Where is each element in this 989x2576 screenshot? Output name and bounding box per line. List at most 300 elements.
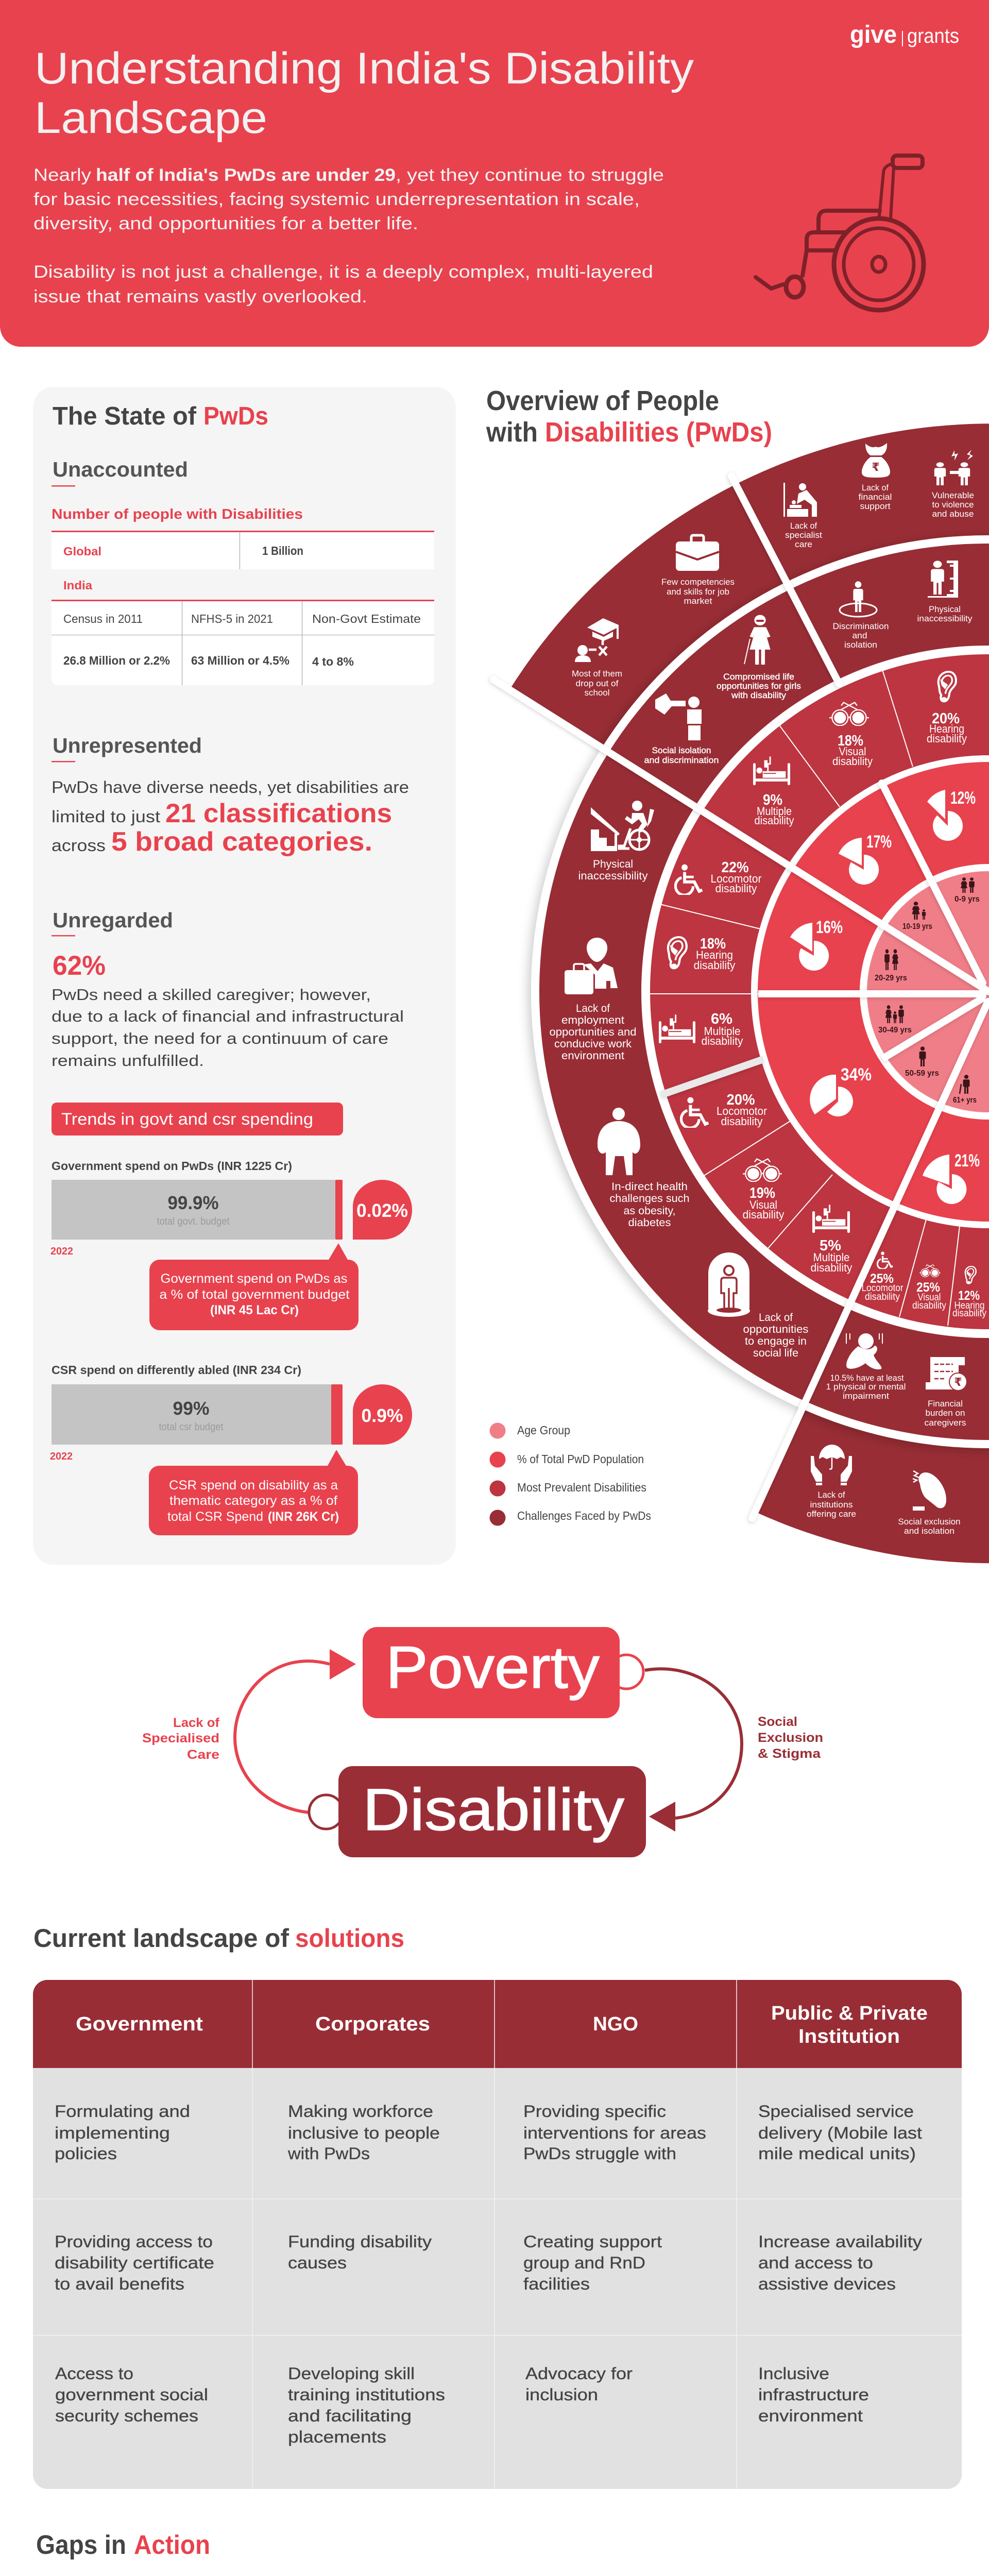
label: social exclusion and stigma: Social [758, 1715, 797, 1729]
box: disability: Disability [363, 1777, 625, 1843]
column: corporates: Developing skill [288, 2364, 415, 2383]
intro text [33, 165, 664, 307]
disability: 25% locomotor [861, 1251, 903, 1302]
challenge: physical or mental impairment: impairment [843, 1391, 889, 1401]
challenge: compromised life opportunities: opportunities for girls [717, 681, 801, 691]
table: number of people with disabilities: 63 Million or 4.5% [191, 654, 289, 667]
chart: radial wheel of PwDs [493, 423, 989, 1563]
challenge: lack of employment: environment [561, 1050, 624, 1062]
challenge: in-direct health: challenges such [610, 1193, 689, 1205]
disability: 9% multiple: 9% [763, 792, 782, 808]
disability: 6% multiple [659, 1011, 743, 1047]
age: 50-59 yrs [905, 1046, 939, 1078]
column: public and private institution: infrastructure [758, 2385, 869, 2404]
table header labels: Institution [798, 2026, 900, 2047]
challenge: financial burden: Financial [928, 1399, 963, 1409]
logo: give grants [850, 21, 959, 48]
disability: 12% hearing: Hearing [954, 1300, 985, 1311]
challenge: vulnerable to violence: and abuse [932, 509, 974, 519]
challenge: financial burden: caregivers [924, 1418, 966, 1428]
column: public and private institution: Specialised service [758, 2102, 914, 2121]
challenge: lack of employment [549, 938, 637, 1062]
challenge: lack of employment: conducive work [554, 1038, 632, 1050]
table: number of people with disabilities: 4 to 8% [312, 655, 354, 668]
challenge: compromised life opportunities: with disability [731, 690, 787, 700]
section: unregarded heading: Unregarded [53, 908, 173, 932]
logo: give grants: grants [907, 25, 959, 47]
heading: gaps in action: Gaps in [36, 2530, 126, 2560]
ring gap [860, 864, 989, 1120]
challenge: lack of specialist care: specialist [785, 530, 822, 540]
disability: 6% multiple: disability [702, 1035, 743, 1047]
challenge: few competencies: market [684, 596, 712, 606]
disability: 19% visual: Visual [749, 1198, 777, 1211]
disability: 9% multiple: disability [754, 814, 794, 827]
stat: 62%: 62% [53, 951, 106, 981]
disability: 5% multiple: disability [811, 1261, 852, 1274]
disability: 20% locomotor: disability [721, 1115, 762, 1128]
challenge: lack of institutions: Lack of [818, 1490, 845, 1500]
share: 34% [810, 1065, 872, 1116]
disability: 20% hearing: 20% [932, 710, 960, 727]
challenge: physical inaccessibility top [917, 561, 973, 623]
overview heading: with [486, 417, 538, 448]
column: corporates: training institutions [288, 2385, 445, 2404]
challenge: lack of specialist care [783, 483, 822, 549]
overview heading: Disabilities (PwDs) [545, 417, 772, 448]
disability: 18% hearing: Hearing [696, 948, 733, 961]
disability: 5% multiple: 5% [820, 1238, 841, 1254]
ring: prevalent disabilities [650, 654, 989, 1329]
intro text: , yet they continue to struggle [396, 165, 664, 185]
column: corporates: with PwDs [287, 2144, 370, 2163]
challenge: discrimination and isolation: Discrimination [832, 621, 889, 631]
challenge: social isolation [644, 693, 719, 765]
label: social exclusion and stigma: Exclusion [758, 1731, 823, 1745]
table: number of people with disabilities: India [63, 579, 92, 592]
column: government: policies [55, 2144, 117, 2163]
thin dividers [646, 668, 960, 1326]
column: government: implementing [55, 2124, 170, 2142]
challenge: social exclusion: and isolation [904, 1526, 954, 1536]
spokes [493, 476, 989, 1518]
disability: 25% locomotor: disability [865, 1292, 900, 1302]
age: 20-29 yrs: 20-29 yrs [875, 974, 907, 982]
ring gap [751, 755, 989, 1228]
challenge: discrimination and isolation: isolation [844, 640, 877, 650]
share: 16%: 16% [816, 918, 843, 937]
challenge: few competencies: and skills for job [667, 587, 729, 597]
age: 10-19 yrs [902, 902, 932, 931]
overview heading [486, 385, 772, 448]
banner background [0, 0, 989, 347]
age: 30-49 yrs [878, 1005, 912, 1035]
callout: CSR spend: (INR 26K Cr) [268, 1510, 339, 1524]
chart: CSR spend: 99% [173, 1398, 209, 1419]
heading: gaps in action [36, 2530, 210, 2560]
chart: government spend: total govt. budget [157, 1216, 230, 1227]
unrepresented text: 21 classifications [165, 799, 392, 828]
header banner [0, 0, 989, 347]
challenge: few competencies [661, 535, 735, 606]
column: public and private institution: delivery (Mobile last [758, 2124, 922, 2142]
heading: current landscape of solutions: Current landscape of [33, 1924, 289, 1953]
chart: government spend [50, 1159, 412, 1257]
table header labels: NGO [593, 2013, 638, 2035]
challenge: physical inaccessibility left: inaccessibility [578, 870, 648, 882]
icon: wheelchair [756, 156, 924, 310]
disability: 18% visual: Visual [839, 745, 866, 758]
heading: current landscape of solutions: solutions [295, 1924, 404, 1953]
unrepresented text: across [52, 836, 106, 855]
caregiver text: support, the need for a continuum of care [52, 1029, 388, 1047]
challenge: financial burden: burden on [925, 1408, 965, 1418]
caregiver text: remains unfulfilled. [52, 1052, 204, 1070]
challenge: lack of financial support: ₹ [872, 461, 880, 474]
disability: 20% hearing: Hearing [929, 722, 964, 735]
heading: gaps in action: Action [134, 2530, 210, 2560]
disability: 22% locomotor [675, 859, 761, 895]
table: number of people with disabilities: Census in 2011 [63, 612, 143, 625]
arrow: disability to poverty [235, 1649, 356, 1829]
section: unaccounted heading: Unaccounted [53, 457, 188, 481]
challenge: lack of financial support: support [860, 501, 891, 511]
challenge: in-direct health: as obesity, [623, 1205, 676, 1217]
column: NGO: Advocacy for [525, 2364, 633, 2383]
challenge: lack of opportunities: Lack of [759, 1312, 793, 1324]
disability: 6% multiple: Multiple [704, 1025, 741, 1038]
table: number of people with disabilities: Global [63, 545, 101, 558]
legend: Age Group [517, 1423, 570, 1437]
column: public and private institution: and access to [758, 2253, 873, 2272]
disability: 25% visual [912, 1265, 946, 1311]
column: public and private institution: mile medical units) [758, 2144, 916, 2163]
share: 21% [923, 1151, 980, 1204]
disability: 22% locomotor: Locomotor [711, 872, 761, 885]
challenge: lack of opportunities [708, 1252, 809, 1359]
challenge: compromised life opportunities: Compromised life [723, 672, 794, 682]
disability: 19% visual [743, 1159, 784, 1221]
challenge: social exclusion [898, 1471, 960, 1536]
chart: CSR spend: 0.9% [362, 1405, 403, 1426]
challenge: lack of employment: employment [561, 1014, 624, 1026]
column: corporates: inclusive to people [288, 2124, 440, 2142]
age: 0-9 yrs [954, 877, 980, 904]
challenge: lack of institutions: offering care [807, 1509, 856, 1519]
table header labels: Government [76, 2013, 203, 2035]
intro text: for basic necessities, facing systemic underrepresentation in scale, [33, 190, 640, 209]
disability: 25% visual: 25% [916, 1280, 940, 1295]
intro text: Disability is not just a challenge, it is a deeply complex, multi-layered [33, 262, 653, 282]
column: corporates: placements [288, 2428, 386, 2446]
share: 17% [839, 832, 892, 885]
challenge: lack of financial support [858, 443, 892, 511]
table header labels [76, 2003, 928, 2047]
callout: government budget: Government spend on PwDs as [161, 1272, 347, 1286]
heading: current landscape of solutions [33, 1924, 404, 1953]
legend: Challenges Faced by PwDs [517, 1509, 651, 1522]
callout: government budget: a % of total government budget [160, 1287, 350, 1302]
disability: 20% locomotor [681, 1092, 767, 1128]
disability: 20% locomotor: 20% [726, 1092, 755, 1108]
challenge: lack of specialist care: Lack of [790, 521, 817, 531]
chart: government spend: 99.9% [168, 1192, 218, 1213]
white ring with shadow [531, 535, 989, 1448]
ring: age group [867, 871, 989, 1112]
disability: 25% visual: Visual [918, 1292, 941, 1303]
disability: 22% locomotor: 22% [721, 859, 749, 876]
disability: 5% multiple: Multiple [813, 1251, 850, 1264]
table backgrounds [33, 1980, 962, 2489]
label: lack of specialised care: Specialised [142, 1731, 219, 1745]
challenge: social isolation: and discrimination [644, 755, 719, 765]
chart: CSR spend: total csr budget [159, 1421, 224, 1433]
challenge: lack of employment: opportunities and [549, 1026, 637, 1038]
overview heading: Overview of People [486, 385, 719, 416]
panel heading [53, 402, 268, 430]
table: solutions [33, 1980, 962, 2489]
challenge: few competencies: Few competencies [661, 577, 735, 587]
callout: CSR spend: thematic category as a % of [169, 1494, 337, 1508]
column: NGO [523, 2102, 706, 2404]
unrepresented text: 5 broad categories. [111, 827, 372, 857]
trends label [52, 1103, 343, 1136]
chart: CSR spend [50, 1363, 412, 1462]
intro text: diversity, and opportunities for a better life. [33, 214, 418, 233]
column: corporates: causes [288, 2253, 347, 2272]
panel heading: PwDs [203, 402, 268, 430]
main title: Landscape [35, 93, 267, 143]
challenge: lack of institutions [807, 1445, 856, 1519]
share: 21%: 21% [954, 1151, 980, 1171]
panel heading: The State of [53, 402, 197, 430]
disability: 20% hearing [927, 672, 967, 745]
section: unrepresented heading: Unrepresented [53, 734, 202, 757]
label: lack of specialised care [142, 1716, 220, 1762]
challenge: in-direct health: In-direct health [611, 1181, 688, 1193]
challenge: drop out of school: drop out of [576, 679, 619, 688]
column: corporates [287, 2102, 445, 2446]
label: lack of specialised care: Lack of [173, 1716, 220, 1730]
table: number of people with disabilities: 1 Billion [262, 544, 303, 557]
challenge: lack of opportunities: opportunities [743, 1324, 809, 1335]
arrow: poverty to disability [609, 1655, 742, 1832]
disability: 20% locomotor: Locomotor [717, 1105, 767, 1117]
caregiver text [52, 986, 404, 1070]
share: 12%: 12% [950, 788, 976, 808]
disability: 20% hearing: disability [927, 732, 967, 745]
challenge: compromised life opportunities [717, 615, 801, 700]
column: government: to avail benefits [55, 2275, 184, 2293]
age: 30-49 yrs: 30-49 yrs [878, 1026, 912, 1035]
challenge: physical inaccessibility top: inaccessibility [917, 614, 973, 623]
challenge: discrimination and isolation [832, 581, 889, 650]
callout: CSR spend: CSR spend on disability as a [169, 1478, 338, 1493]
ring: share of PwD population [758, 762, 989, 1222]
column: NGO: facilities [523, 2275, 590, 2293]
chart: government spend: Government spend on PwDs (INR 1225 Cr) [52, 1159, 292, 1173]
box: poverty: Poverty [386, 1635, 600, 1701]
share: 34%: 34% [841, 1065, 872, 1084]
age: 50-59 yrs: 50-59 yrs [905, 1069, 939, 1078]
callout: government budget [149, 1243, 359, 1330]
intro text: Nearly [33, 165, 91, 185]
challenge: lack of opportunities: to engage in [745, 1335, 807, 1347]
main title [35, 44, 694, 143]
callout: CSR spend: total CSR Spend [167, 1510, 263, 1524]
ring gap [641, 646, 989, 1338]
table: number of people with disabilities: Non-Govt Estimate [312, 612, 421, 625]
disability: 6% multiple: 6% [711, 1011, 732, 1027]
challenge: lack of opportunities: social life [753, 1347, 798, 1359]
panel background [33, 387, 456, 1565]
challenge: physical or mental impairment [826, 1333, 906, 1401]
column: government: security schemes [55, 2406, 198, 2425]
age: 20-29 yrs [875, 949, 907, 982]
column: NGO: inclusion [525, 2385, 598, 2404]
logo: give grants: give [850, 21, 897, 48]
disability: 25% locomotor: Locomotor [861, 1283, 903, 1294]
table title: Number of people with Disabilities [52, 506, 303, 522]
disability: 9% multiple: Multiple [757, 805, 792, 818]
diagram: poverty disability cycle [142, 1627, 823, 1857]
challenge: social exclusion: Social exclusion [898, 1517, 960, 1527]
legend [489, 1423, 651, 1526]
share: 17%: 17% [866, 832, 892, 852]
caregiver text: due to a lack of financial and infrastructural [52, 1007, 404, 1025]
chart: CSR spend: CSR spend on differently abled (INR 234 Cr) [52, 1363, 301, 1377]
legend: % of Total PwD Population [517, 1452, 644, 1466]
age: 61+ yrs [953, 1075, 977, 1105]
table header labels: Public & Private [771, 2003, 928, 2024]
label: lack of specialised care: Care [187, 1748, 219, 1762]
challenge: physical or mental impairment: 10.5% have at least [830, 1373, 904, 1383]
label: social exclusion and stigma: & Stigma [758, 1747, 821, 1761]
table: number of people with disabilities [52, 531, 434, 685]
column: public and private institution: environment [758, 2406, 863, 2425]
challenge: lack of financial support: Lack of [862, 483, 889, 493]
challenge: social isolation: Social isolation [652, 745, 711, 755]
chart: government spend: 0.02% [356, 1200, 408, 1221]
disability: 25% visual: disability [912, 1300, 946, 1311]
age: 61+ yrs: 61+ yrs [953, 1096, 977, 1105]
chart: CSR spend: 2022 [50, 1451, 73, 1462]
disability: 18% hearing: disability [693, 959, 736, 972]
column: government: Access to [55, 2364, 133, 2383]
column: corporates: Making workforce [288, 2102, 433, 2121]
main title: Understanding India's Disability [35, 44, 694, 93]
callout: CSR spend [149, 1450, 358, 1535]
challenge: financial burden: ₹ [954, 1376, 962, 1389]
challenge: vulnerable to violence: to violence [932, 500, 974, 510]
disability: 18% visual: 18% [838, 733, 863, 749]
challenge: lack of institutions: institutions [810, 1500, 853, 1510]
disability: 5% multiple [811, 1205, 852, 1274]
column: corporates: and facilitating [288, 2406, 412, 2425]
caregiver text: PwDs need a skilled caregiver; however, [52, 986, 371, 1004]
column: NGO: PwDs struggle with [523, 2144, 676, 2163]
challenge: lack of financial support: financial [858, 492, 892, 502]
challenge: physical inaccessibility top: Physical [929, 604, 961, 614]
challenge: vulnerable to violence [932, 450, 974, 519]
unrepresented text: limited to just [52, 807, 160, 826]
disability: 9% multiple [753, 756, 794, 827]
panel: the state of PwDs [33, 387, 456, 1565]
share: 12% [927, 788, 976, 841]
column: government [55, 2102, 214, 2425]
box: poverty [363, 1627, 620, 1718]
share: 16% [790, 918, 843, 971]
challenge: drop out of school: school [584, 688, 610, 698]
challenge: discrimination and isolation: and [852, 631, 867, 640]
outer challenges sector [509, 423, 989, 1563]
label: social exclusion and stigma [758, 1715, 823, 1761]
ring: challenges faced [539, 544, 989, 1440]
column: government: government social [55, 2385, 208, 2404]
challenge: physical or mental impairment: 1 physical or mental [826, 1382, 906, 1392]
disability: 12% hearing: 12% [958, 1289, 980, 1303]
challenge: in-direct health [598, 1108, 689, 1229]
table: number of people with disabilities: 26.8 Million or 2.2% [63, 654, 170, 667]
column: public and private institution: Inclusive [758, 2364, 829, 2383]
disability: 18% hearing: 18% [700, 936, 726, 952]
column: corporates: Funding disability [288, 2232, 432, 2251]
column: government: Formulating and [55, 2102, 190, 2121]
column: public and private institution [758, 2102, 922, 2425]
disability: 12% hearing: disability [952, 1308, 986, 1319]
challenge: lack of specialist care: care [795, 539, 812, 549]
disability: 18% visual: disability [832, 755, 873, 768]
challenge: physical inaccessibility left [578, 801, 654, 882]
column: NGO: Creating support [523, 2232, 662, 2251]
unrepresented text: PwDs have diverse needs, yet disabilities are [52, 778, 409, 796]
trends label: Trends in govt and csr spending [61, 1110, 313, 1128]
disability: 19% visual: 19% [749, 1185, 775, 1201]
challenge: physical inaccessibility left: Physical [593, 858, 633, 870]
column: NGO: interventions for areas [523, 2124, 706, 2142]
column: NGO: Providing specific [523, 2102, 666, 2121]
disability: 18% visual [829, 703, 873, 768]
disability: 18% hearing [668, 936, 736, 972]
intro text: half of India's PwDs are under 29 [96, 165, 396, 185]
challenge: financial burden [924, 1357, 967, 1428]
column: public and private institution: Increase availability [758, 2232, 922, 2251]
disability: 22% locomotor: disability [715, 882, 757, 895]
challenge: vulnerable to violence: Vulnerable [932, 490, 974, 500]
disability: 12% hearing [952, 1266, 986, 1319]
challenge: lack of employment: Lack of [576, 1003, 610, 1014]
table header labels: Corporates [315, 2013, 430, 2035]
age: 0-9 yrs: 0-9 yrs [954, 895, 980, 904]
challenge: drop out of school [572, 618, 622, 698]
unrepresented text [52, 778, 409, 857]
intro text: issue that remains vastly overlooked. [33, 287, 367, 307]
callout: government budget: (INR 45 Lac Cr) [210, 1303, 299, 1317]
column: NGO: group and RnD [523, 2253, 645, 2272]
age: 10-19 yrs: 10-19 yrs [902, 922, 932, 931]
column: public and private institution: assistive devices [758, 2275, 896, 2293]
challenge: in-direct health: diabetes [628, 1217, 671, 1229]
box: disability [338, 1766, 646, 1857]
disability: 25% locomotor: 25% [870, 1272, 894, 1286]
legend: Most Prevalent Disabilities [517, 1481, 646, 1494]
disability: 19% visual: disability [743, 1208, 784, 1221]
column: government: disability certificate [55, 2253, 214, 2272]
chart: government spend: 2022 [50, 1246, 73, 1257]
column: government: Providing access to [55, 2232, 213, 2251]
challenge: drop out of school: Most of them [572, 669, 622, 679]
table: number of people with disabilities: NFHS-5 in 2021 [191, 612, 273, 625]
